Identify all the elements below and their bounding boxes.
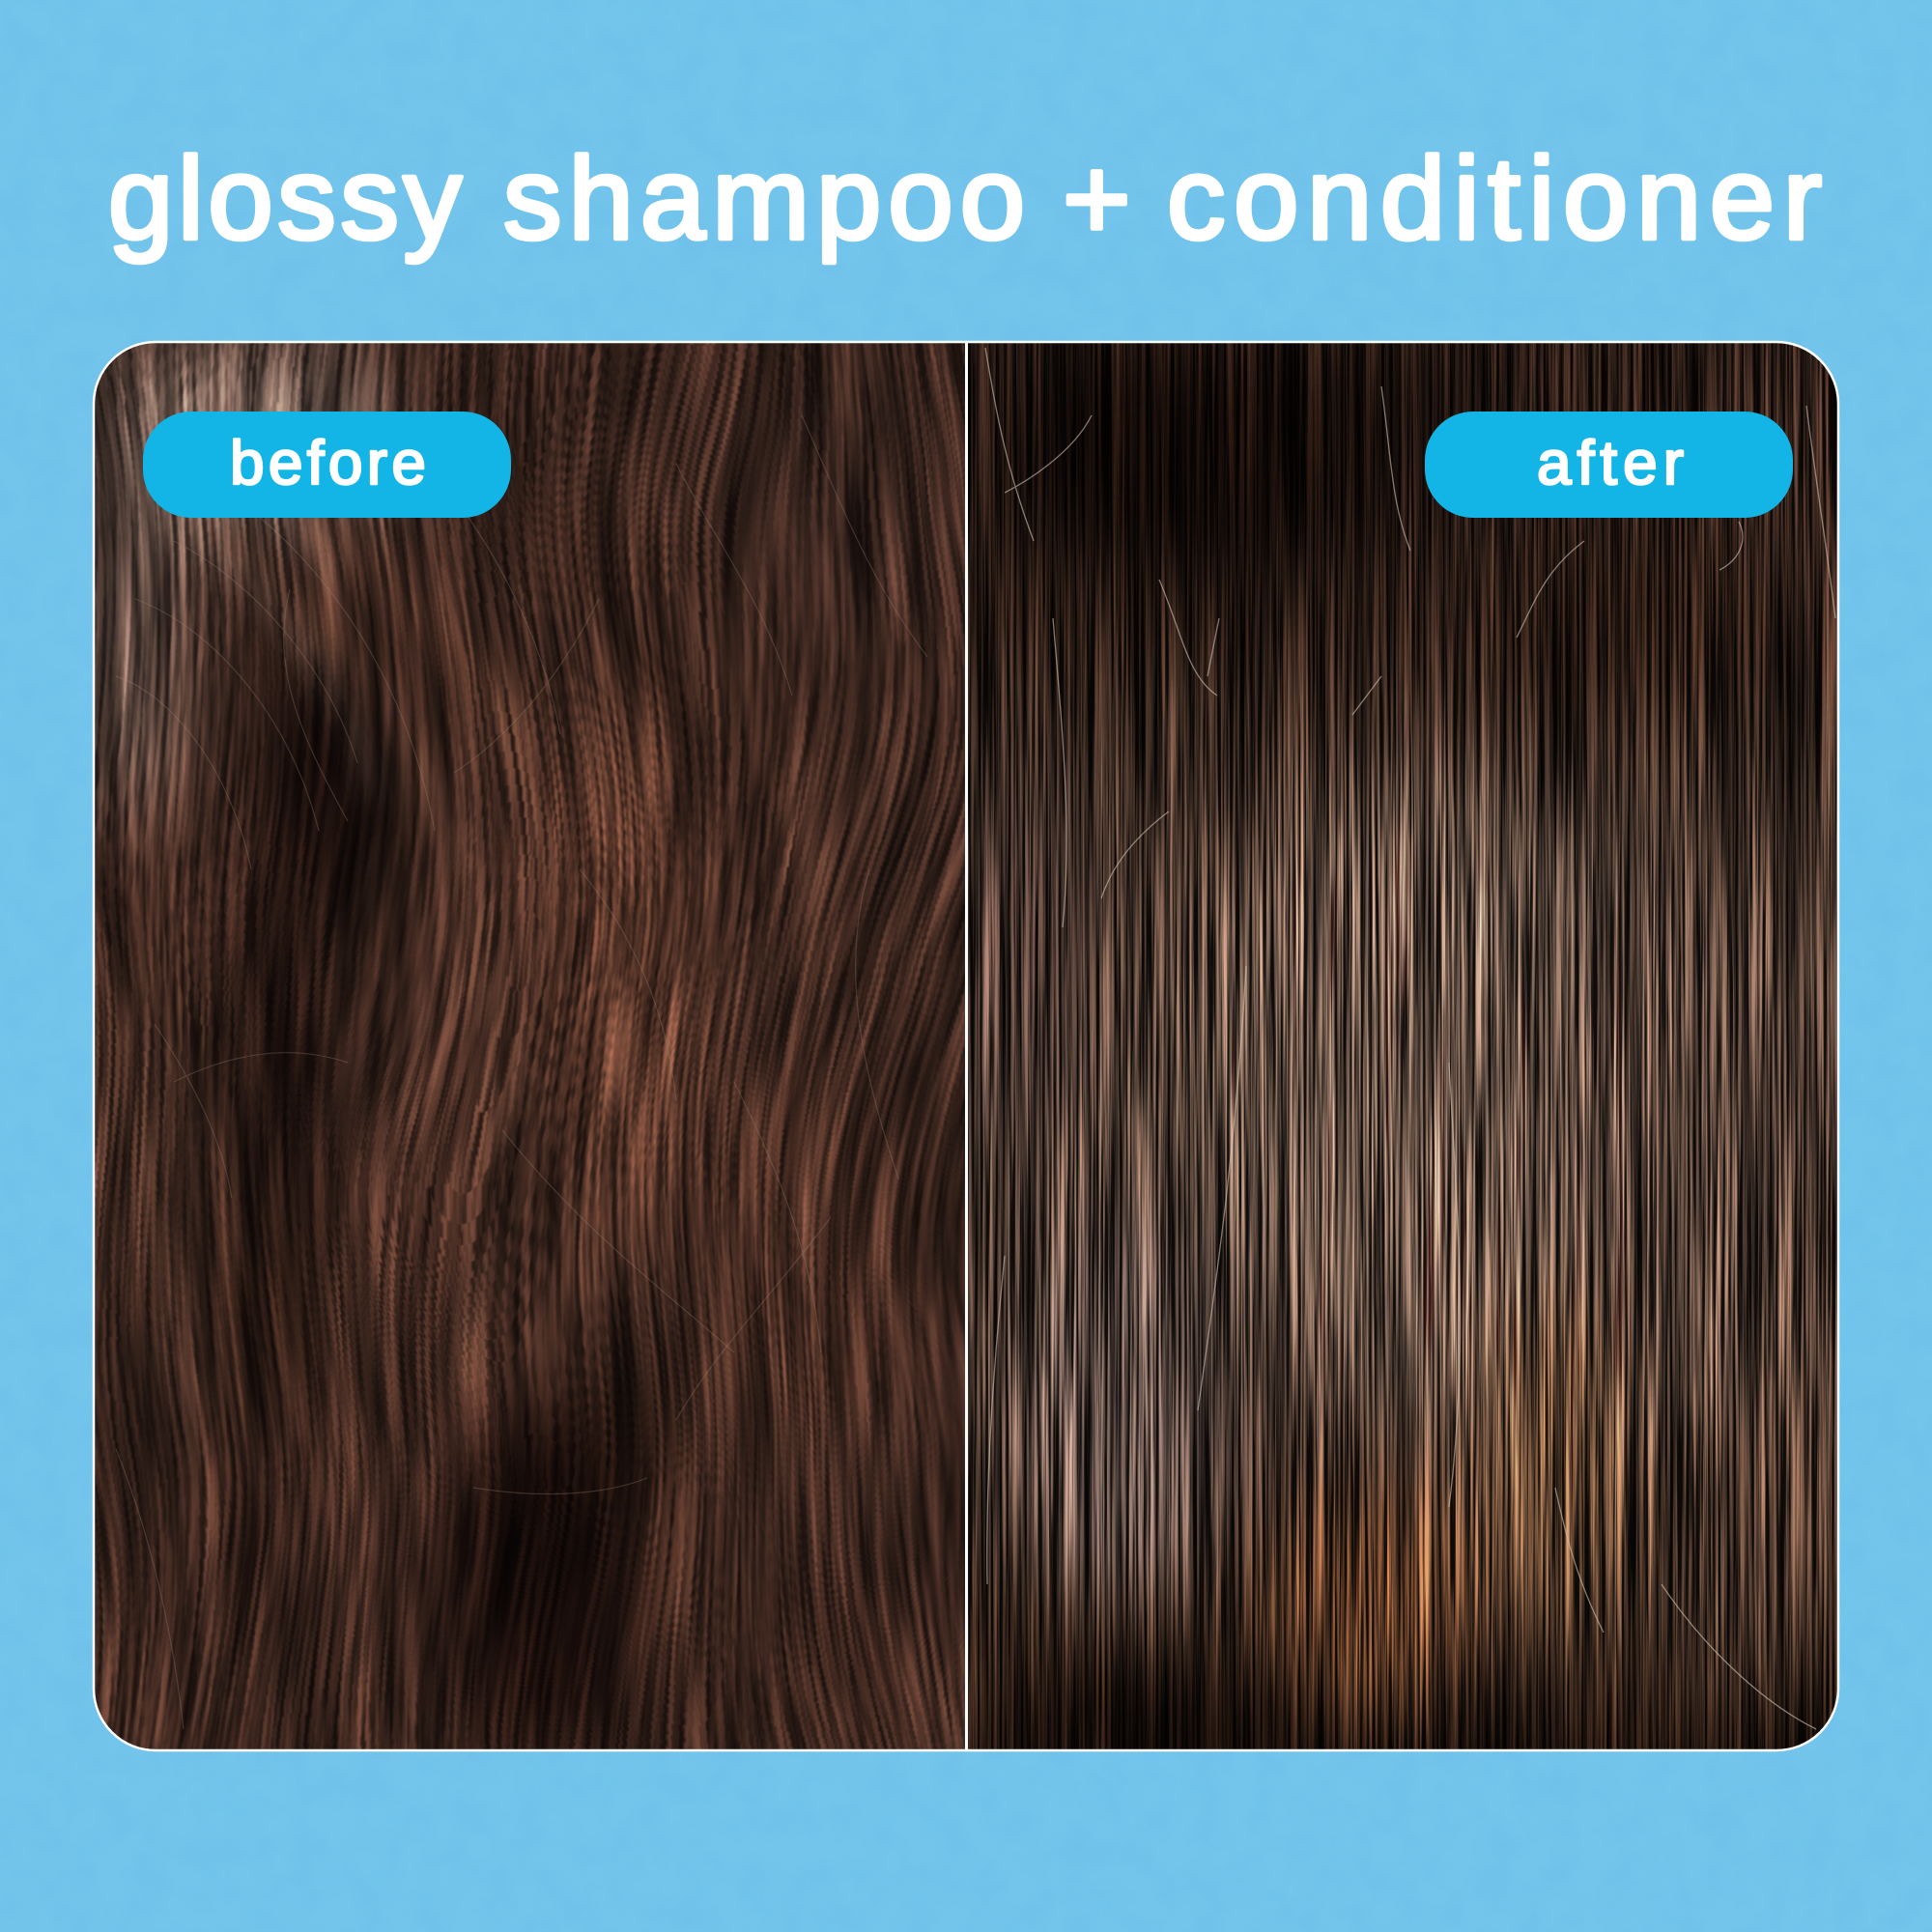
flyaway hairs xyxy=(985,348,1835,1729)
pill label: before: before xyxy=(230,428,426,497)
title: + xyxy=(1063,132,1131,264)
title: shampoo xyxy=(503,132,1025,264)
photo: before hair xyxy=(95,343,965,1749)
flyaway hairs xyxy=(116,415,927,1729)
photo: after hair xyxy=(947,328,1855,1773)
title xyxy=(108,132,1822,264)
pill label: after: after xyxy=(1537,428,1684,497)
panel: before and after comparison xyxy=(93,340,1839,1752)
panel outline xyxy=(94,342,1838,1750)
title: glossy xyxy=(108,132,462,264)
coarse hair bands xyxy=(947,328,1855,1768)
pill label: before xyxy=(143,412,511,518)
fine hair strands xyxy=(947,328,1855,1768)
title: conditioner xyxy=(1167,132,1822,264)
hair locks xyxy=(116,435,829,1748)
fine hair strands xyxy=(95,343,965,1749)
coarse hair bands xyxy=(95,343,965,1749)
center divider xyxy=(965,342,968,1750)
pill label: after xyxy=(1425,412,1793,518)
